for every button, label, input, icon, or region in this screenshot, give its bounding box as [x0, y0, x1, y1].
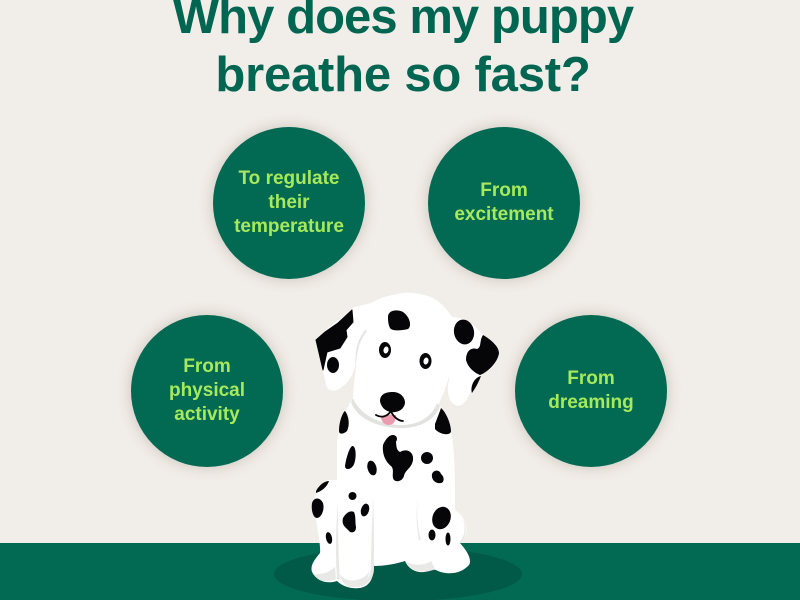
- circle: regulate temperature: [213, 127, 365, 279]
- head spot: [388, 310, 410, 330]
- circle: excitement: From: [480, 180, 528, 201]
- circle: dreaming: From: [567, 368, 615, 389]
- circle: physical activity: activity: [174, 404, 240, 425]
- right ear: [448, 317, 499, 406]
- circle: regulate temperature: their: [268, 192, 310, 213]
- tongue: [381, 415, 396, 425]
- circle: regulate temperature: To regulate: [238, 168, 339, 189]
- puppy head: [352, 293, 455, 426]
- circle: physical activity: [131, 315, 283, 467]
- leg shading: [357, 497, 374, 587]
- nose and mouth: [376, 392, 405, 421]
- left ear: [316, 310, 356, 391]
- head shading: [355, 330, 367, 368]
- circle: dreaming: [515, 315, 667, 467]
- circle: excitement: excitement: [454, 204, 554, 225]
- puppy body spots: [312, 408, 454, 546]
- circle: physical activity: physical: [169, 380, 245, 401]
- circle: regulate temperature: temperature: [234, 216, 344, 237]
- circle: physical activity: From: [183, 356, 231, 377]
- circle: excitement: [428, 127, 580, 279]
- floor band: [0, 543, 800, 600]
- collar: [351, 398, 440, 428]
- title: [173, 0, 634, 102]
- eyes: [379, 342, 432, 369]
- puppy body: [311, 397, 470, 588]
- circle: dreaming: dreaming: [548, 392, 634, 413]
- floor shadow: [274, 547, 522, 600]
- title: breathe so fast?: [215, 48, 591, 102]
